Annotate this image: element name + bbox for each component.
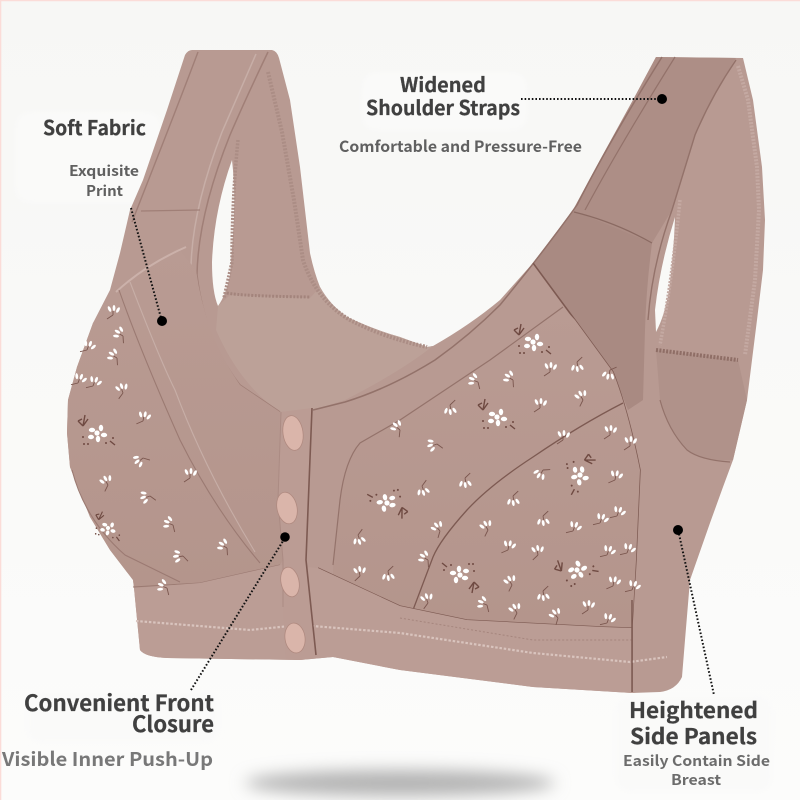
side seam lower [631, 600, 633, 692]
heading: convenient front closure [24, 686, 214, 739]
left armhole [212, 160, 234, 306]
leader line: closure [191, 541, 283, 690]
callout: soft fabric [43, 112, 167, 326]
right side seam [533, 263, 640, 692]
right gusset [533, 210, 652, 410]
right cup printed panel [333, 307, 640, 628]
heading: widened shoulder straps: Widened [400, 69, 486, 98]
heading: convenient front closure: Convenient Front [24, 686, 214, 718]
heading: widened shoulder straps: Shoulder Straps [366, 92, 520, 121]
leader line: straps [521, 98, 658, 100]
subtext: easily contain side breast: Easily Contain Side [623, 750, 770, 771]
leader line: side panels [679, 534, 714, 695]
callout: widened shoulder straps [339, 69, 667, 157]
snap buttons [274, 414, 307, 654]
left cup [67, 248, 283, 588]
front band [134, 565, 667, 693]
inner neck panel [216, 287, 433, 412]
garment silhouette [67, 50, 765, 693]
right strap stitching [313, 57, 759, 462]
heading: widened shoulder straps [366, 69, 520, 121]
subtext: exquisite print [69, 160, 139, 201]
floral print: right cup [349, 324, 643, 629]
heading: convenient front closure: Closure [132, 707, 214, 739]
dot: straps [657, 94, 667, 104]
callout: convenient front closure [1, 532, 290, 772]
heading: heightened side panels [629, 694, 758, 751]
subtext: exquisite print: Exquisite [69, 160, 139, 181]
callout: heightened side panels [623, 525, 770, 790]
left cup seams [72, 282, 280, 587]
subtext: comfortable: Comfortable and Pressure-Free [339, 135, 582, 157]
subtext: easily contain side breast: Breast [671, 769, 721, 790]
subtext: exquisite print: Print [86, 180, 123, 201]
heading: heightened side panels: Side Panels [630, 720, 757, 751]
right armhole [655, 217, 675, 332]
dot: side panels [673, 525, 683, 535]
heading: heightened side panels: Heightened [629, 694, 758, 725]
dot: closure [280, 532, 290, 542]
bra garment [67, 50, 765, 693]
dot: soft fabric [157, 316, 167, 326]
subtext: visible inner push-up: Visible Inner Push-Up [1, 745, 213, 772]
right strap front [573, 57, 736, 243]
leader line: soft fabric [131, 208, 161, 318]
front placket [278, 408, 318, 660]
floral print: left cup [71, 305, 234, 595]
left strap stitching [132, 52, 427, 420]
ground shadow [245, 770, 555, 796]
subtext: easily contain side breast [623, 750, 770, 790]
right back lobe [656, 350, 747, 460]
heading: soft fabric: Soft Fabric [43, 112, 146, 141]
